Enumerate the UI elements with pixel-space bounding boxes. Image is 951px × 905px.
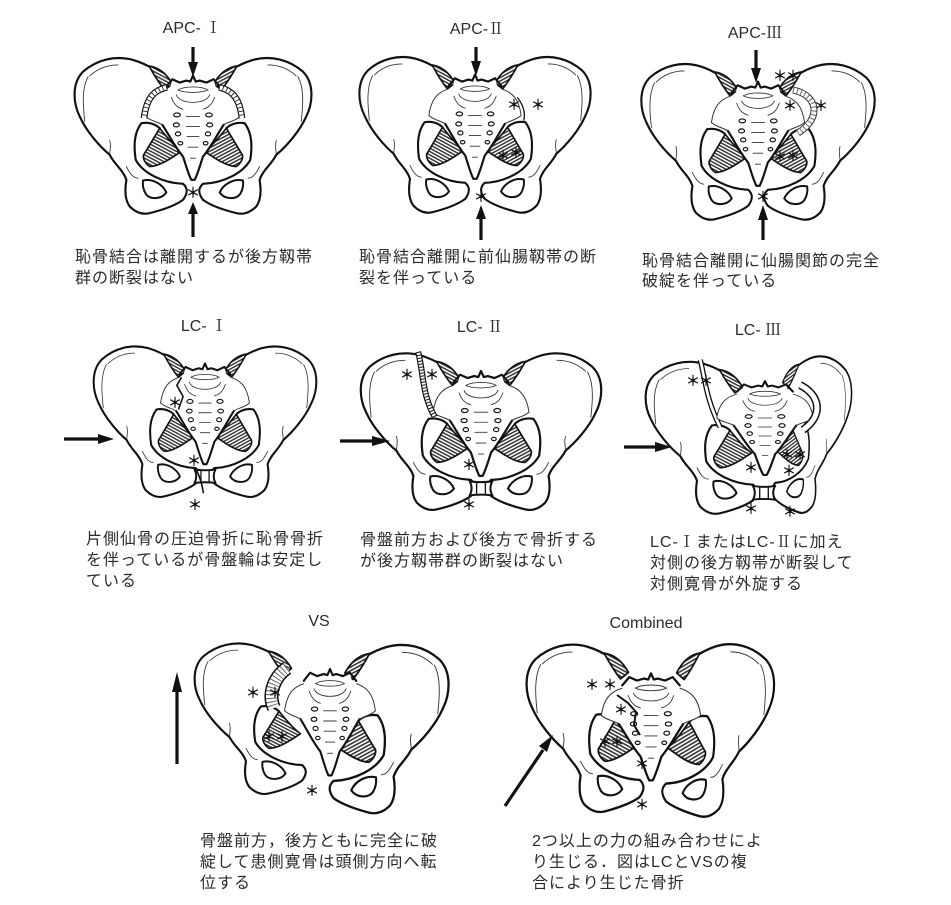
markers: injuries bbox=[756, 66, 828, 207]
pelvis diagram: LC-II bbox=[361, 352, 601, 510]
title: APC-I: APC- Ⅰ bbox=[163, 15, 221, 38]
markers: fractures: ＊ bbox=[635, 795, 649, 815]
caption: VS: 綻して患側寛骨は頭側方向へ転 bbox=[200, 853, 438, 871]
pelvis diagram: APC-I bbox=[75, 58, 311, 214]
markers: fractures bbox=[585, 675, 649, 815]
markers: fractures: ＊ bbox=[187, 451, 201, 471]
markers: fractures: ＊ bbox=[425, 365, 439, 385]
markers: injuries: ＊ bbox=[496, 146, 510, 166]
markers: fractures: ＊ bbox=[783, 502, 797, 522]
pelvis diagram: VS bbox=[195, 643, 449, 813]
panel: VS bbox=[172, 613, 449, 892]
markers: fractures: ＊ bbox=[610, 732, 624, 752]
markers: injuries: ＊ bbox=[783, 96, 797, 116]
markers: fractures: ＊ bbox=[168, 393, 182, 413]
caption: LC-I: を伴っているが骨盤輪は安定し bbox=[86, 551, 323, 569]
caption: APC-I: 恥骨結合は離開するが後方靱帯 bbox=[75, 248, 313, 266]
title: APC-II: APC-Ⅱ bbox=[450, 16, 504, 39]
title: APC-III: APC-Ⅲ bbox=[728, 20, 782, 43]
markers: injuries: ＊ bbox=[773, 66, 787, 86]
markers: fractures: ＊ bbox=[462, 455, 476, 475]
caption: LC-I: 片側仙骨の圧迫骨折に恥骨骨折 bbox=[86, 530, 324, 548]
markers: fractures: ＊ bbox=[598, 732, 612, 752]
title: LC-II: LC- Ⅱ bbox=[457, 314, 503, 337]
pelvis diagram: APC-II bbox=[359, 57, 591, 213]
title: VS: VS bbox=[308, 613, 330, 630]
pelvis diagram: Combined bbox=[527, 644, 774, 817]
markers: injuries: ＊ bbox=[773, 147, 787, 167]
markers: injuries bbox=[474, 95, 545, 207]
markers: fractures bbox=[686, 371, 807, 522]
ruptured sacroiliac joint: APC-III bbox=[793, 90, 814, 133]
arrow: lateral compression bbox=[340, 436, 390, 446]
markers: fractures: ＊ bbox=[400, 365, 414, 385]
arrow: from above bbox=[751, 50, 761, 83]
caption: LC-III: 対側寛骨が外旋する bbox=[650, 575, 803, 593]
panel: Combined bbox=[505, 615, 774, 892]
markers: fractures: ＊ bbox=[268, 683, 282, 703]
markers: fractures: ＊ bbox=[246, 683, 260, 703]
markers: injuries: ＊ bbox=[786, 66, 800, 86]
markers: fractures: ＊ bbox=[585, 675, 599, 695]
title: LC-III: LC- Ⅲ bbox=[735, 317, 781, 340]
markers: injuries: ＊ bbox=[507, 95, 521, 115]
caption: LC-II: 骨盤前方および後方で骨折する bbox=[360, 531, 598, 549]
caption: VS: 骨盤前方，後方ともに完全に破 bbox=[200, 832, 438, 850]
panel: APC-I bbox=[75, 15, 313, 287]
marker: symphysis: ＊ bbox=[186, 183, 200, 203]
markers: fractures: ＊ bbox=[780, 445, 794, 465]
caption: LC-I: ている bbox=[86, 573, 137, 590]
markers: injuries: ＊ bbox=[814, 96, 828, 116]
title: Combined: Combined bbox=[610, 615, 682, 632]
markers: fractures: ＊ bbox=[603, 675, 617, 695]
arrow: lateral compression bbox=[624, 442, 672, 452]
arrow: from above bbox=[471, 47, 481, 76]
markers: fractures: ＊ bbox=[686, 371, 700, 391]
markers: fractures bbox=[246, 683, 319, 801]
markers: injuries: ＊ bbox=[509, 143, 523, 163]
panel: LC-II bbox=[340, 314, 601, 570]
caption: APC-III: 破綻を伴っている bbox=[642, 272, 777, 290]
caption: Combined: 2つ以上の力の組み合わせによ bbox=[532, 832, 763, 850]
pelvis diagram: LC-III bbox=[646, 356, 852, 514]
arrow: from below bbox=[476, 205, 486, 240]
arrow: anterior compression from above bbox=[188, 47, 198, 77]
arrow: from below bbox=[758, 205, 768, 240]
caption: VS: 位する bbox=[200, 874, 251, 892]
markers: fractures: ＊ bbox=[305, 781, 319, 801]
title: LC-I: LC- Ⅰ bbox=[181, 313, 227, 336]
markers: fractures: ＊ bbox=[614, 700, 628, 720]
markers: injuries: ＊ bbox=[756, 187, 770, 207]
caption: LC-III: LC-ⅠまたはLC-Ⅱに加え bbox=[650, 529, 844, 552]
panel: APC-III bbox=[641, 20, 880, 290]
markers: fractures: ＊ bbox=[275, 727, 289, 747]
caption: Combined: り生じる．図はLCとVSの複 bbox=[532, 853, 748, 871]
markers: fractures: ＊ bbox=[793, 445, 807, 465]
panel: APC-II bbox=[359, 16, 597, 287]
markers: injuries: ＊ bbox=[474, 187, 488, 207]
pelvis diagram: APC-III bbox=[641, 64, 875, 220]
markers: fractures: ＊ bbox=[744, 499, 758, 519]
markers: fractures: ＊ bbox=[635, 754, 649, 774]
caption: APC-III: 恥骨結合離開に仙腸関節の完全 bbox=[642, 252, 880, 270]
markers: fractures: ＊ bbox=[188, 495, 202, 515]
panel: LC-III bbox=[624, 317, 854, 593]
caption: APC-II: 裂を伴っている bbox=[359, 269, 477, 287]
markers: fractures: ＊ bbox=[462, 495, 476, 515]
markers: fractures: ＊ bbox=[744, 458, 758, 478]
caption: APC-II: 恥骨結合離開に前仙腸靱帯の断 bbox=[359, 248, 597, 266]
panel: LC-I bbox=[64, 313, 324, 590]
caption: LC-III: 対側の後方靱帯が断裂して bbox=[650, 554, 854, 572]
caption: APC-I: 群の断裂はない bbox=[75, 269, 194, 287]
markers: fractures bbox=[168, 393, 202, 515]
caption: Combined: 合により生じた骨折 bbox=[532, 874, 685, 892]
caption: LC-II: が後方靱帯群の断裂はない bbox=[360, 552, 564, 570]
arrow: lateral compression bbox=[64, 434, 114, 444]
arrow: combined force bbox=[505, 735, 553, 806]
markers: injuries: ＊ bbox=[786, 146, 800, 166]
markers: injuries: ＊ bbox=[531, 95, 545, 115]
markers: fractures: ＊ bbox=[699, 371, 713, 391]
arrow: anterior compression from below bbox=[188, 202, 198, 237]
markers: fractures bbox=[400, 365, 476, 515]
pelvis diagram: LC-I bbox=[94, 346, 316, 497]
arrow: vertical shear bbox=[172, 672, 182, 764]
markers: fractures: ＊ bbox=[782, 461, 796, 481]
markers: fractures: ＊ bbox=[262, 727, 276, 747]
